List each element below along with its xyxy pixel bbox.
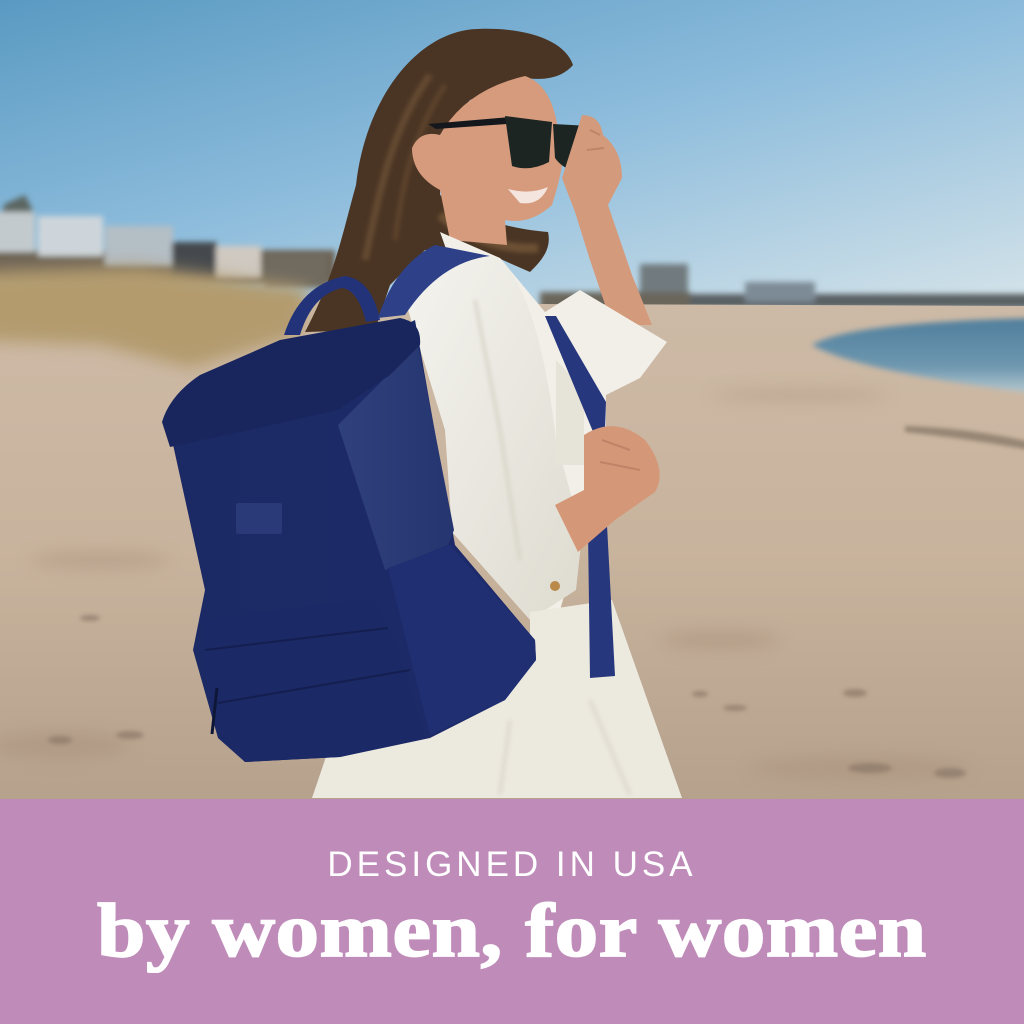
lid <box>162 318 420 447</box>
main body <box>172 320 536 762</box>
face and neck <box>412 76 563 245</box>
distant shoreline and houses <box>0 195 1024 310</box>
sky <box>0 0 1024 350</box>
brand patch <box>236 503 282 534</box>
front pocket <box>205 598 425 762</box>
shoulder strap <box>545 316 615 678</box>
hair <box>305 29 573 332</box>
zipper pull <box>212 688 217 734</box>
sand texture <box>0 390 970 780</box>
backpack <box>162 245 536 762</box>
sunglasses <box>428 116 590 172</box>
sand beach <box>0 300 1024 805</box>
subheading: DESIGNED IN USA <box>327 845 697 884</box>
handle and strap <box>284 276 380 335</box>
raised forearm and hand <box>562 115 652 325</box>
banner <box>0 799 1024 1024</box>
headline: by women, for women <box>97 889 927 973</box>
white shirt <box>312 232 682 798</box>
seaweed line and pebbles <box>48 426 1024 778</box>
water <box>812 318 1024 394</box>
side panel <box>338 345 454 570</box>
photo: woman with navy backpack on a beach <box>0 0 1024 799</box>
dune grass <box>0 266 310 368</box>
hand on strap and forearm <box>550 426 660 591</box>
